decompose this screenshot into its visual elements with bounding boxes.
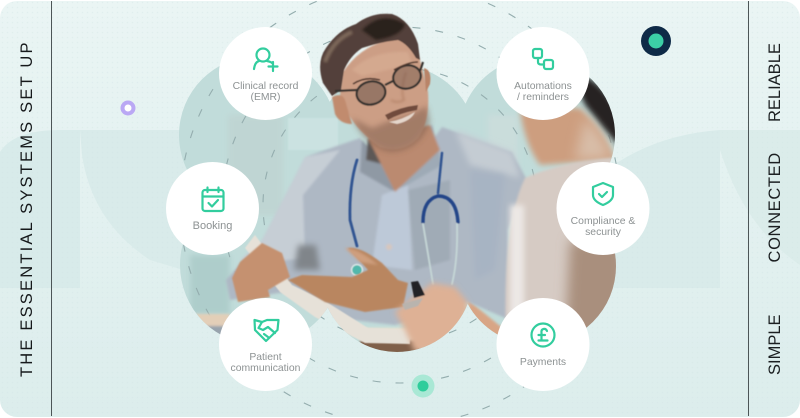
text: / reminders [517,92,569,103]
marker: purple ring [122,102,134,114]
paper [245,235,410,344]
label: connected: CONNECTED [766,152,784,262]
photo background [179,66,615,343]
marker: navy dot [641,26,671,56]
hands [232,243,468,352]
marker: green dot [412,374,434,398]
text: Booking [193,220,232,232]
label: simple: SIMPLE [766,314,784,375]
text: Payments [520,357,566,368]
icon: handshake [254,320,278,341]
woman patient [504,77,616,328]
node: automations [496,27,590,120]
dashed orbit rings [180,0,620,418]
photo: doctor and patient [185,14,625,354]
doctor head [320,14,430,152]
text: Clinical record [233,81,298,92]
icon: user plus [254,48,278,71]
text: Compliance & [571,216,635,227]
text: Automations [514,81,572,92]
text: (EMR) [250,92,281,103]
text: Patient [249,352,282,363]
icon: linked squares [533,49,553,69]
title: THE ESSENTIAL SYSTEMS SET UP [18,40,36,377]
desk and laptop [196,302,501,352]
text: communication [231,363,301,374]
icon: pound coin [532,324,554,346]
node: payments [496,298,590,391]
icon: shield check [593,183,613,205]
node: patient communication [219,298,312,391]
label: reliable: RELIABLE [766,43,784,122]
node: booking [166,162,259,255]
doctor shirt [226,124,527,325]
text: security [585,227,622,238]
icon: calendar check [202,188,224,211]
node: clinical record [219,27,312,120]
stethoscope [350,153,458,284]
node: compliance [556,162,650,255]
